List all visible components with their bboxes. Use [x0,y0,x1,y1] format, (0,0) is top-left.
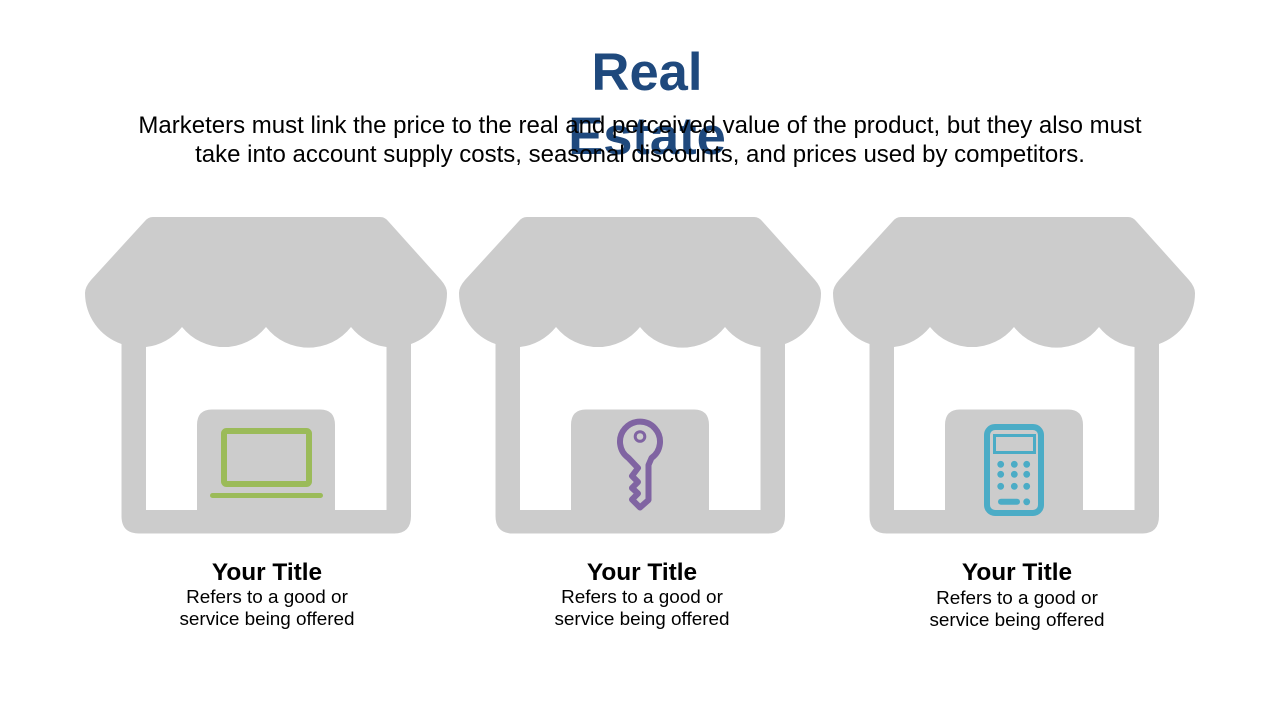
caption 3 text: Refers to a good or [936,588,1098,609]
caption 1 text: Refers to a good or [186,587,348,608]
caption 1 [179,559,355,630]
store 3 with calculator icon [833,217,1195,534]
caption 2 heading: Your Title [587,559,697,586]
title: Estate [568,107,726,166]
icon: key [620,422,660,508]
store 2 with key icon [459,217,821,534]
icon: laptop [210,431,323,498]
caption 3 text [929,588,1105,631]
caption 1 text: service being offered [179,609,355,630]
caption 3 heading: Your Title [962,559,1072,586]
caption 2 [554,559,730,630]
caption 2 text: service being offered [554,609,730,630]
intro paragraph: take into account supply costs, seasonal discounts, and prices used by competitors. [195,141,1085,168]
caption 2 text [554,587,730,630]
caption 3 text: service being offered [929,610,1105,631]
title [568,43,726,166]
intro paragraph: Marketers must link the price to the real and perceived value of the product, but they also must [138,112,1142,139]
caption 1 heading: Your Title [212,559,322,586]
caption 1 text [179,587,355,630]
intro paragraph [138,112,1142,168]
caption 3 [929,559,1105,631]
icon: calculator [987,427,1041,513]
store 1 with laptop icon [85,217,447,534]
title: Real [592,43,702,102]
caption 2 text: Refers to a good or [561,587,723,608]
